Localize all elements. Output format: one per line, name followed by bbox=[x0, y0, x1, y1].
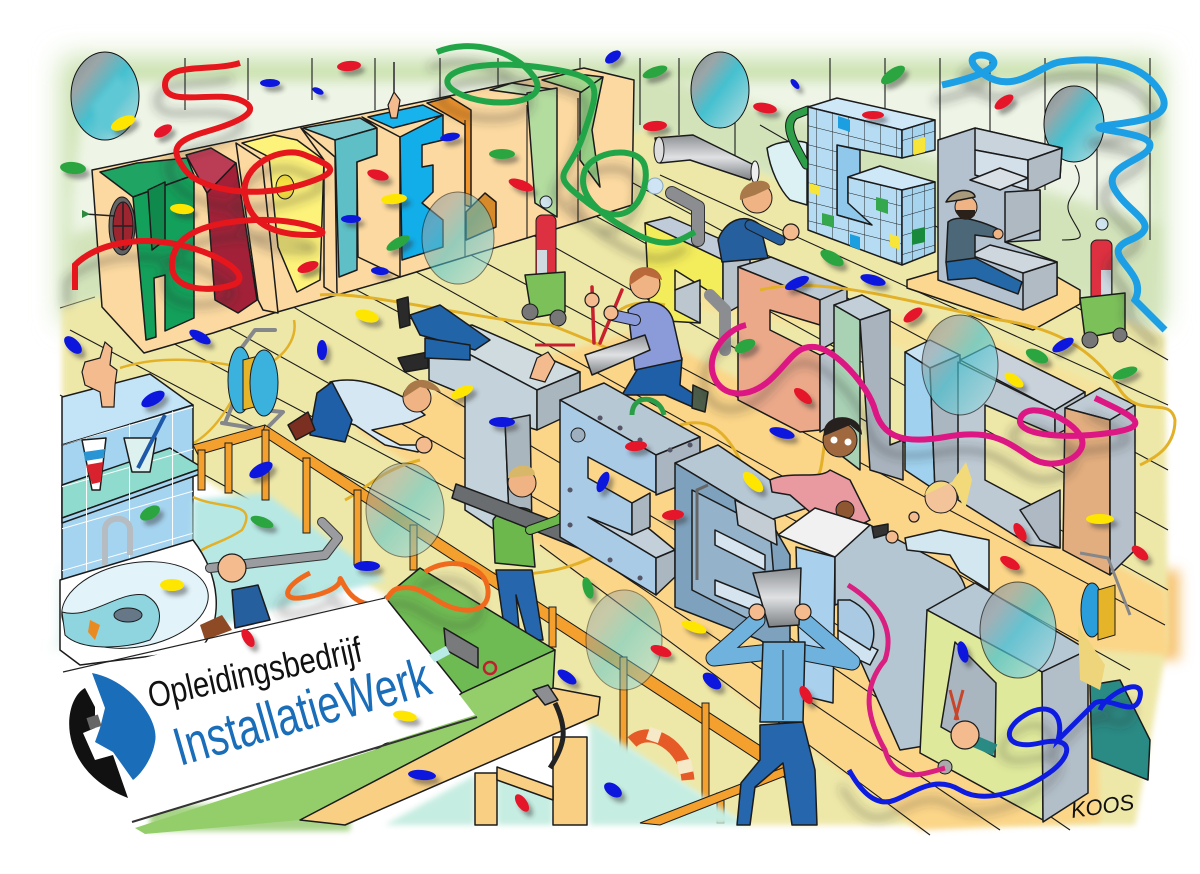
white paper sheet bbox=[778, 508, 870, 557]
cable reel right bbox=[1080, 553, 1130, 640]
company name line two: InstallatieWerk bbox=[167, 647, 438, 778]
hand with screwdriver on wall bbox=[388, 62, 400, 118]
green machine box bbox=[300, 568, 555, 800]
yellow extension cables bbox=[120, 285, 1175, 574]
railing bbox=[193, 425, 790, 823]
drain plug with black cable bbox=[533, 685, 563, 768]
company name: Opleidingsbedrijf bbox=[144, 628, 366, 716]
letter R bbox=[242, 128, 337, 295]
cable reel bbox=[222, 330, 283, 430]
lower rail bbox=[640, 765, 795, 825]
platform and letter E with bearded man bbox=[907, 128, 1080, 330]
magenta hose bbox=[848, 585, 945, 775]
letter D rivet panel bbox=[920, 583, 1088, 822]
signature: KOOS bbox=[1069, 789, 1136, 823]
man in blue behind the tiles bbox=[718, 181, 799, 262]
hand with wrench bbox=[530, 345, 575, 382]
letter G tiled block bbox=[808, 98, 935, 265]
streamers bbox=[75, 46, 1165, 802]
blonde woman bbox=[872, 462, 989, 590]
glass with toothbrush bbox=[124, 415, 165, 472]
man lying with pliers bbox=[288, 380, 441, 453]
letter T steel bbox=[429, 325, 580, 540]
bathroom tiled wall bbox=[62, 374, 203, 600]
letter I bbox=[490, 83, 557, 217]
letter H curved steel bbox=[796, 525, 968, 750]
base plate row bbox=[92, 68, 634, 353]
life ring bbox=[632, 733, 692, 780]
green streamer bbox=[437, 46, 695, 243]
letter K bbox=[465, 73, 603, 257]
letter E riveted bbox=[560, 383, 700, 595]
sink bbox=[55, 519, 216, 665]
balloon top-right bbox=[1044, 86, 1104, 240]
letter row: back wall plates bbox=[82, 68, 634, 353]
letter T bbox=[303, 117, 400, 277]
salmon letter E bbox=[710, 257, 847, 432]
yellow block letter bbox=[645, 217, 750, 323]
letter L bbox=[427, 97, 496, 240]
green deck bbox=[135, 688, 553, 834]
coloured tiles bbox=[838, 116, 850, 132]
dark skinned man at paper bbox=[770, 417, 870, 525]
letter E bbox=[368, 105, 443, 260]
balloon over letter E bbox=[422, 192, 494, 284]
dartboard bbox=[82, 197, 135, 255]
red streamer bbox=[75, 63, 330, 290]
thumbs up hand bbox=[82, 342, 117, 407]
toothpaste tube bbox=[82, 438, 106, 490]
balloon over railing bbox=[366, 463, 444, 557]
grey elbow pipe and spray bbox=[647, 178, 698, 240]
blue streamer bbox=[942, 55, 1165, 330]
teal shirt man on the right bbox=[1078, 625, 1150, 780]
toilet bowl with green pipe bbox=[767, 110, 808, 205]
balloon on blue letter bbox=[922, 315, 998, 415]
blue bottom streamer bbox=[849, 687, 1140, 802]
balloon top-left bbox=[71, 52, 139, 140]
grey pipe on the wall bbox=[654, 135, 759, 183]
man with bucket on his head bbox=[714, 568, 852, 825]
balloon top-middle bbox=[691, 52, 749, 128]
red gas cylinder right bbox=[1080, 218, 1127, 348]
balloon on letter D bbox=[980, 582, 1056, 678]
wooden deck and posts bbox=[300, 688, 600, 825]
orange floor bands bbox=[355, 330, 1168, 830]
letter C steel with control panel bbox=[675, 445, 810, 660]
letter C grey bbox=[958, 345, 1085, 548]
magenta streamer bbox=[712, 325, 1135, 464]
balloon lower middle bbox=[586, 590, 662, 690]
water pool below deck bbox=[385, 722, 747, 825]
letter H bbox=[100, 158, 194, 340]
legs sticking out of T bbox=[397, 297, 490, 372]
tan letter I bbox=[1063, 388, 1135, 575]
letter A bbox=[186, 143, 278, 313]
blue letter I bbox=[905, 340, 960, 490]
logo mark bbox=[69, 673, 156, 798]
back wall bbox=[60, 58, 1160, 330]
pipe held by hand bbox=[200, 522, 338, 640]
aqua floor area bbox=[190, 493, 385, 640]
logo card bbox=[47, 598, 477, 822]
red gas cylinder back bbox=[522, 196, 566, 326]
man kneeling with bolt cutters bbox=[585, 267, 708, 412]
man in green with pipes bbox=[452, 466, 592, 640]
floor bbox=[60, 125, 1168, 835]
orange streamer bbox=[288, 564, 488, 610]
confetti bbox=[60, 48, 1151, 814]
green grey letter L bbox=[834, 295, 903, 480]
bearded man bbox=[946, 190, 1022, 294]
